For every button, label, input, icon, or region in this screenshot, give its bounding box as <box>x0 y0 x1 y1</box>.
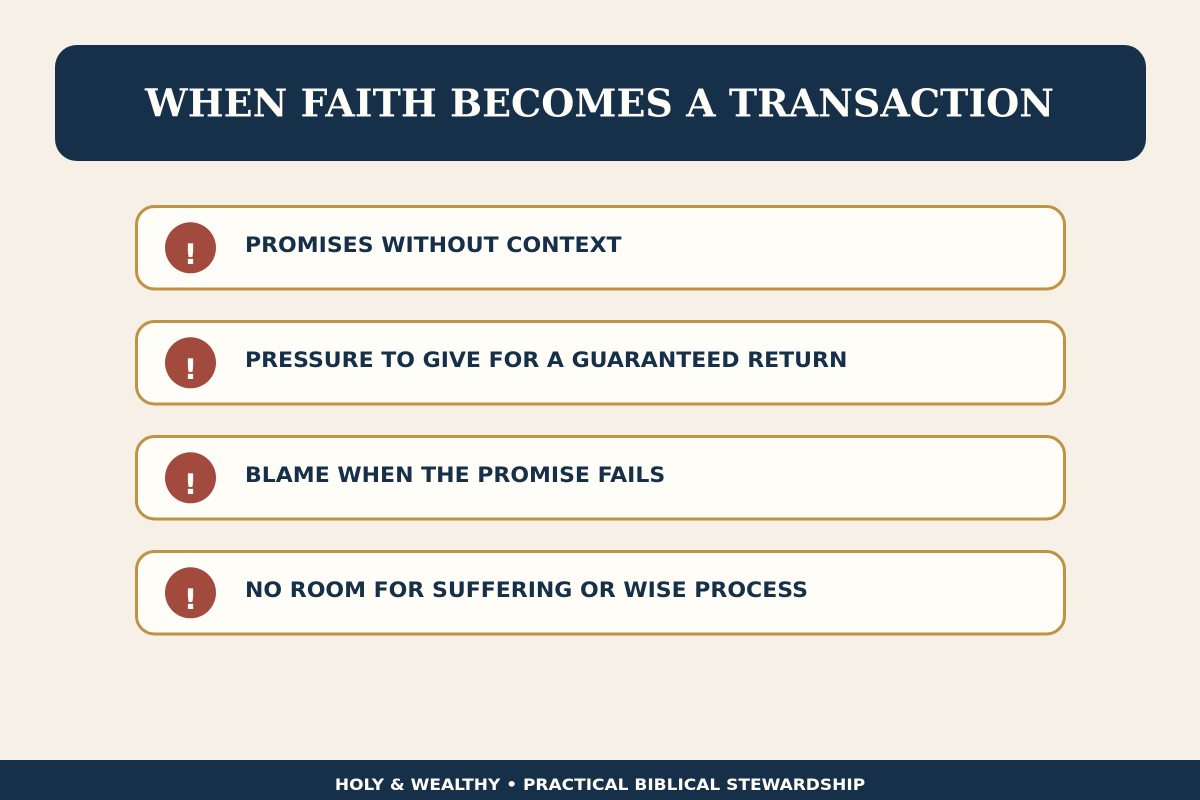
title: WHEN FAITH BECOMES A TRANSACTION <box>144 80 1054 126</box>
icon: warning: ! <box>184 467 197 500</box>
panel: pressure to give <box>136 322 1064 404</box>
footer text: HOLY & WEALTHY • PRACTICAL BIBLICAL STEWARDSHIP <box>335 775 865 794</box>
icon: warning <box>165 567 216 618</box>
item text: PRESSURE TO GIVE FOR A GUARANTEED RETURN <box>245 348 847 373</box>
icon: warning <box>165 452 216 503</box>
item text: PROMISES WITHOUT CONTEXT <box>245 233 622 258</box>
icon: warning: ! <box>184 237 197 270</box>
panel: no room for suffering <box>136 552 1064 634</box>
icon: warning <box>165 337 216 388</box>
panel: blame <box>136 436 1064 519</box>
icon: warning <box>165 222 216 273</box>
item text: BLAME WHEN THE PROMISE FAILS <box>245 463 665 488</box>
icon: warning: ! <box>184 582 197 615</box>
item text: NO ROOM FOR SUFFERING OR WISE PROCESS <box>245 578 808 603</box>
panel: promises without context <box>136 206 1064 289</box>
icon: warning: ! <box>184 352 197 385</box>
footer bar <box>0 760 1200 800</box>
header banner <box>55 45 1146 161</box>
